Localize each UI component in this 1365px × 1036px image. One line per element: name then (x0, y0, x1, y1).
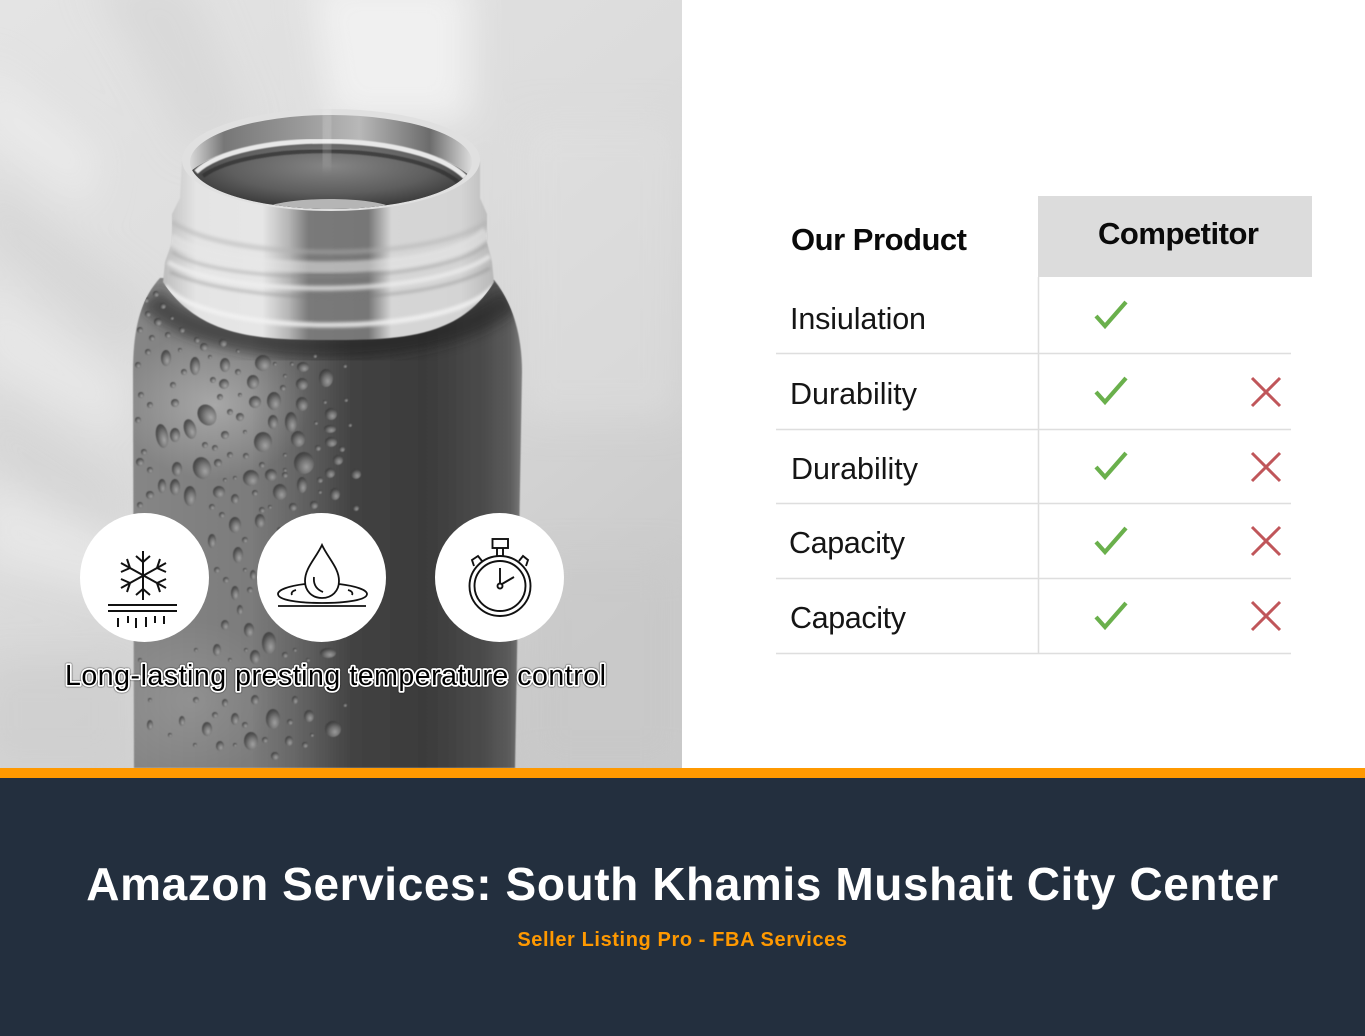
check marks (1096, 302, 1126, 627)
panel: comparison table (776, 196, 1312, 654)
bottle body (100, 278, 522, 780)
icon circle: stopwatch (435, 513, 564, 642)
footer subtitle: Seller Listing Pro - FBA Services (517, 929, 848, 951)
row label: capacity 2: Capacity (790, 601, 907, 635)
panel: product photo (0, 0, 682, 768)
panel: footer (0, 778, 1365, 1036)
orange divider bar (0, 768, 1365, 778)
competitor header cell (1038, 196, 1312, 277)
cross marks (1252, 378, 1280, 630)
background wall with light streaks (0, 0, 682, 768)
row label: durability: Durability (790, 377, 918, 411)
row label: durability 2: Durability (791, 452, 919, 486)
water droplets (135, 291, 361, 760)
caption: Long-lasting presting temperature control (65, 660, 606, 692)
bottle opening (182, 109, 480, 215)
bottle steel neck (163, 109, 494, 340)
row label: insulation: Insiulation (790, 302, 926, 336)
row label: capacity: Capacity (789, 526, 906, 560)
icon circle: cold insulation (80, 513, 209, 642)
icon circle: water drop (257, 513, 386, 642)
column heading: competitor: Competitor (1098, 216, 1259, 251)
footer title: Amazon Services: South Khamis Mushait City Center (86, 858, 1279, 910)
column heading: our product: Our Product (791, 222, 967, 257)
